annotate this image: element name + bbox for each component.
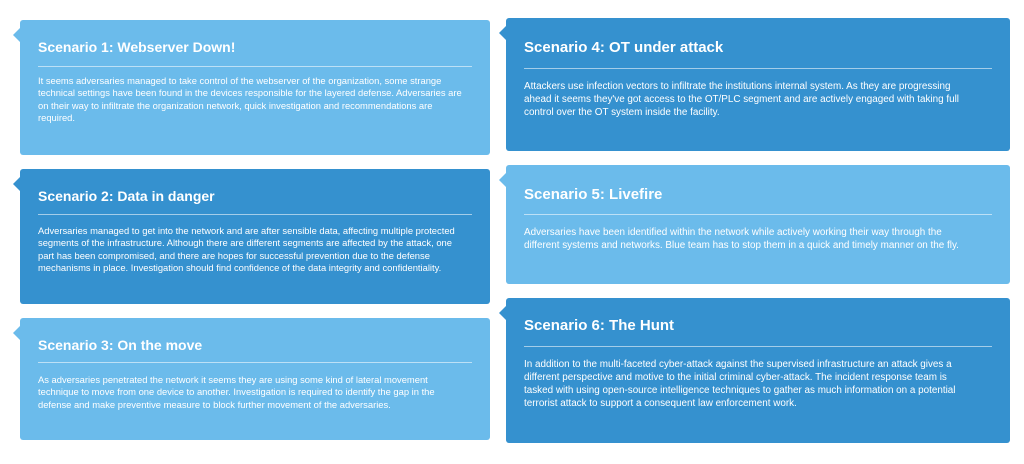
text block: Attackers use infection vectors to infiltrate the institutions internal system. As they are progressing ahead it seems they've got access to the OT/PLC segment and are actively engaged with taking full control over the OT system inside the facility. [524, 81, 959, 118]
heading: Scenario 5: Livefire [524, 186, 662, 203]
heading: Scenario 4: OT under attack [524, 39, 723, 56]
text block: It seems adversaries managed to take control of the webserver of the organization, some strange technical settings have been found in the devices responsible for the layered defense. Adversaries are on their way to infiltrate the organization network, quick investigation and recommendations are required. [38, 75, 462, 123]
panel: scenario 1 [20, 20, 490, 155]
heading: Scenario 3: On the move [38, 337, 202, 353]
text block: In addition to the multi-faceted cyber-attack against the supervised infrastructure an attack gives a different perspective and motive to the initial criminal cyber-attack. The incident response team is tasked with using open-source intelligence techniques to gather as much information on a potential terrorist attack to support a consequent law enforcement work. [524, 359, 955, 409]
panel: scenario 5 [506, 165, 1010, 284]
heading: Scenario 1: Webserver Down! [38, 39, 235, 55]
text block: Adversaries have been identified within the network while actively working their way through the different systems and networks. Blue team has to stop them in a quick and timely manner on the fly. [524, 227, 959, 251]
panel: scenario 6 [506, 298, 1010, 443]
heading: Scenario 2: Data in danger [38, 188, 215, 204]
panel: scenario 2 [20, 169, 490, 304]
text block: Adversaries managed to get into the network and are after sensible data, affecting multiple protected segments of the infrastructure. Although there are different segments are affected by the attack, one part has been compromised, and there are hopes for successful prevention due to the defense mechanisms in place. Investigation should find confidence of the data integrity and confidentiality. [38, 225, 455, 273]
heading: Scenario 6: The Hunt [524, 317, 674, 334]
panel: scenario 4 [506, 18, 1010, 151]
text block: As adversaries penetrated the network it seems they are using some kind of lateral movement technique to move from one device to another. Investigation is required to identify the gap in the defense and make preventive measure to block further movement of the adversaries. [38, 374, 435, 410]
panel: scenario 3 [20, 318, 490, 440]
